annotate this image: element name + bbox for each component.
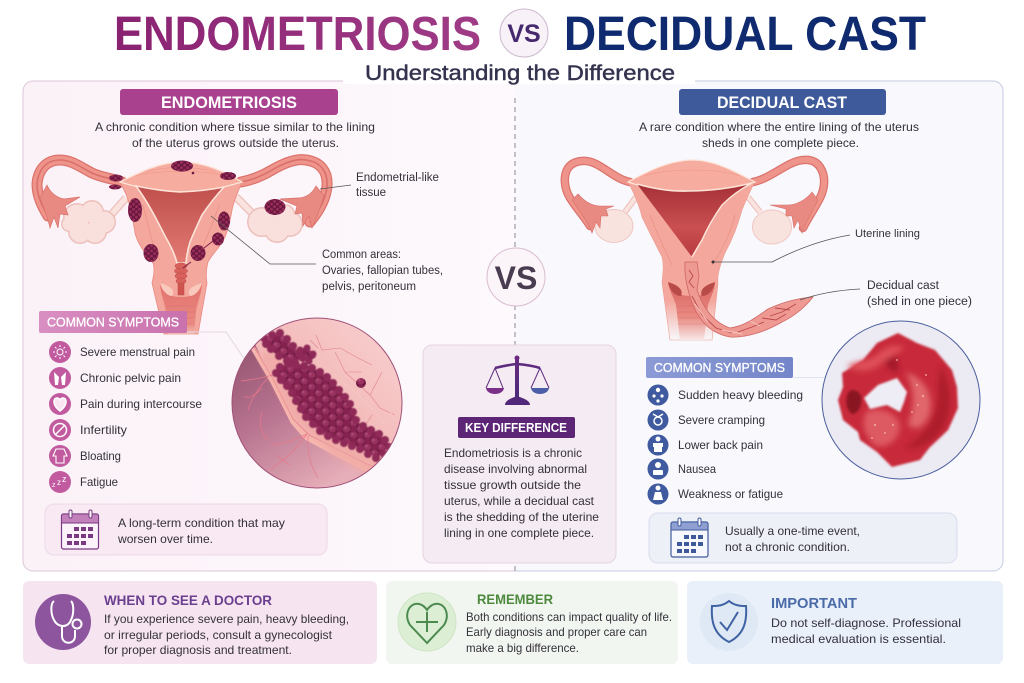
- heading: decidual cast badge: [679, 89, 886, 115]
- panel: when to see a doctor: [23, 581, 377, 664]
- panel: remember: REMEMBER: [477, 591, 553, 607]
- tissue wall edge: [251, 346, 354, 465]
- icon: heart with plus: [398, 593, 456, 651]
- key difference panel: disease involving abnormal: [444, 462, 587, 476]
- text block: endometriosis definition: A chronic condition where tissue similar to the lining: [95, 120, 375, 134]
- callout: decidual cast: (shed in one piece): [867, 296, 972, 308]
- ovaries: [595, 197, 792, 244]
- panel: remember: Early diagnosis and proper care can: [466, 625, 647, 639]
- panel: important: IMPORTANT: [771, 595, 857, 612]
- callout: long-term condition: worsen over time.: [117, 532, 213, 546]
- list: endometriosis symptoms: Chronic pelvic pain: [80, 371, 181, 385]
- icon: infertility: [54, 424, 66, 436]
- callout: common areas: Common areas:: [322, 249, 401, 261]
- callout: common areas: Ovaries, fallopian tubes,: [322, 265, 443, 277]
- list: endometriosis symptoms: Bloating: [80, 449, 121, 463]
- key difference panel: lining in one complete piece.: [444, 526, 594, 540]
- panel: when to see a doctor: or irregular periods, consult a gynecologist: [104, 628, 333, 642]
- key difference panel: tissue growth outside the: [444, 478, 581, 492]
- title: ENDOMETRIOSIS: [114, 8, 481, 61]
- fallopian tubes: [565, 160, 824, 228]
- callout: uterine lining: Uterine lining: [855, 228, 920, 240]
- uterus body: [120, 162, 242, 334]
- icon: bleeding: [652, 388, 664, 403]
- panel: when to see a doctor: for proper diagnosis and treatment.: [104, 643, 292, 657]
- illustration: uterus with decidual cast: [565, 160, 824, 340]
- title: VS: [507, 20, 541, 48]
- list: endometriosis symptoms: Pain during intercourse: [80, 397, 202, 411]
- text block: endometriosis definition: [95, 120, 375, 150]
- icon: fatigue: [52, 474, 67, 489]
- subtitle: Understanding the Difference: [365, 61, 675, 85]
- illustration: uterus with endometriosis: [37, 160, 327, 334]
- heading: endometriosis badge: [120, 89, 338, 115]
- callout: long-term condition: A long-term condition that may: [118, 516, 285, 530]
- endometrial implants: [109, 160, 286, 262]
- illustration: decidual cast specimen: [822, 321, 980, 479]
- key difference panel: uterus, while a decidual cast: [444, 494, 595, 508]
- icon: back pain: [653, 436, 663, 452]
- list: endometriosis symptoms: Fatigue: [80, 475, 118, 489]
- callout: endometrial-like tissue: Endometrial-like: [356, 172, 439, 184]
- heading: common symptoms (endometriosis): [39, 311, 245, 360]
- icon: calendar: [62, 510, 98, 549]
- blood vessels: [241, 375, 318, 478]
- fimbriae: [40, 185, 80, 228]
- callout: endometrial-like tissue: tissue: [356, 187, 386, 199]
- panel: when to see a doctor: If you experience severe pain, heavy bleeding,: [104, 612, 349, 626]
- icon: weakness: [653, 486, 663, 500]
- mauve cavity region: [232, 345, 363, 488]
- icon: fatigue: z: [52, 482, 56, 489]
- icon: calendar: [671, 518, 708, 557]
- key difference panel: [423, 345, 616, 563]
- right ovary: [236, 197, 303, 243]
- icon: bloating: [53, 449, 67, 463]
- list: decidual cast symptoms: Severe cramping: [678, 413, 765, 427]
- list: decidual cast symptoms: [648, 384, 803, 504]
- callout: endometrial-like tissue: [320, 172, 439, 199]
- callout: common areas: pelvis, peritoneum: [322, 281, 416, 293]
- icon: pain burst: [53, 345, 67, 359]
- list: endometriosis symptoms: [49, 341, 202, 493]
- list: endometriosis symptoms: Infertility: [80, 423, 127, 437]
- icon: shield check: [700, 593, 758, 651]
- text block: decidual cast definition: sheds in one complete piece.: [702, 136, 859, 150]
- VS badge: [487, 248, 545, 306]
- key difference panel: is the shedding of the uterine: [444, 510, 599, 524]
- icon: fatigue: z: [62, 474, 67, 484]
- list: decidual cast symptoms: Sudden heavy bleeding: [678, 388, 803, 402]
- key difference panel: Endometriosis is a chronic: [444, 446, 582, 460]
- panel: comparison background: [23, 70, 1003, 571]
- specimen shading: [847, 346, 950, 448]
- callout: uterine lining: [712, 228, 920, 264]
- text block: decidual cast definition: [639, 120, 919, 150]
- list: decidual cast symptoms: Weakness or fatigue: [678, 487, 783, 501]
- panel: remember: Both conditions can impact quality of life.: [466, 610, 672, 624]
- text block: decidual cast definition: A rare condition where the entire lining of the uterus: [639, 120, 919, 134]
- heading: decidual cast badge: DECIDUAL CAST: [717, 94, 847, 112]
- specimen central hole: [864, 378, 907, 412]
- left ovary: [61, 198, 126, 244]
- VS badge: VS: [495, 260, 537, 296]
- berry clusters: [260, 329, 393, 462]
- vaginal canal: [668, 282, 715, 340]
- heading: common symptoms (decidual cast): [646, 357, 826, 378]
- decidual cast strip: [685, 262, 813, 337]
- text block: endometriosis definition: of the uterus grows outside the uterus.: [132, 136, 339, 150]
- uterus body: [628, 160, 755, 340]
- panel: important: Do not self-diagnose. Professional: [771, 616, 961, 630]
- icon: stethoscope: [35, 594, 91, 650]
- callout: long-term condition: [45, 504, 327, 555]
- heading: common symptoms (decidual cast): COMMON SYMPTOMS: [654, 361, 785, 375]
- heading: endometriosis badge: ENDOMETRIOSIS: [161, 94, 297, 112]
- title: DECIDUAL CAST: [564, 8, 926, 61]
- callout: one-time event: [649, 513, 957, 563]
- key difference panel: KEY DIFFERENCE: [465, 421, 567, 435]
- list: endometriosis symptoms: Severe menstrual pain: [80, 345, 195, 359]
- icon: fatigue: z: [57, 478, 61, 487]
- list: decidual cast symptoms: Lower back pain: [678, 438, 763, 452]
- panel: important: medical evaluation is essential.: [771, 632, 946, 646]
- callout: common areas: [211, 216, 443, 293]
- icon: pelvic pain: [54, 372, 66, 385]
- fallopian tubes: [37, 160, 327, 222]
- panel: remember: [386, 581, 678, 664]
- fimbriae: [572, 194, 614, 233]
- icon: heart: [54, 398, 66, 411]
- panel: important: [687, 581, 1003, 664]
- title: [114, 8, 926, 61]
- panel: when to see a doctor: WHEN TO SEE A DOCTOR: [104, 592, 272, 608]
- illustration: endometrial tissue close-up: [225, 318, 402, 495]
- cervix and canal: [160, 283, 202, 334]
- icon: cramping: [653, 414, 663, 425]
- center dashed divider: [514, 98, 516, 575]
- icon: nausea: [653, 462, 663, 475]
- callout: decidual cast: Decidual cast: [867, 280, 940, 292]
- list: decidual cast symptoms: Nausea: [678, 462, 716, 476]
- callout: decidual cast: [800, 280, 972, 308]
- callout: one-time event: not a chronic condition.: [725, 540, 850, 554]
- callout: one-time event: Usually a one-time event,: [725, 524, 860, 538]
- icon: balance scale: [486, 356, 549, 405]
- panel: remember: make a big difference.: [466, 641, 579, 655]
- heading: common symptoms (endometriosis): COMMON SYMPTOMS: [47, 316, 179, 330]
